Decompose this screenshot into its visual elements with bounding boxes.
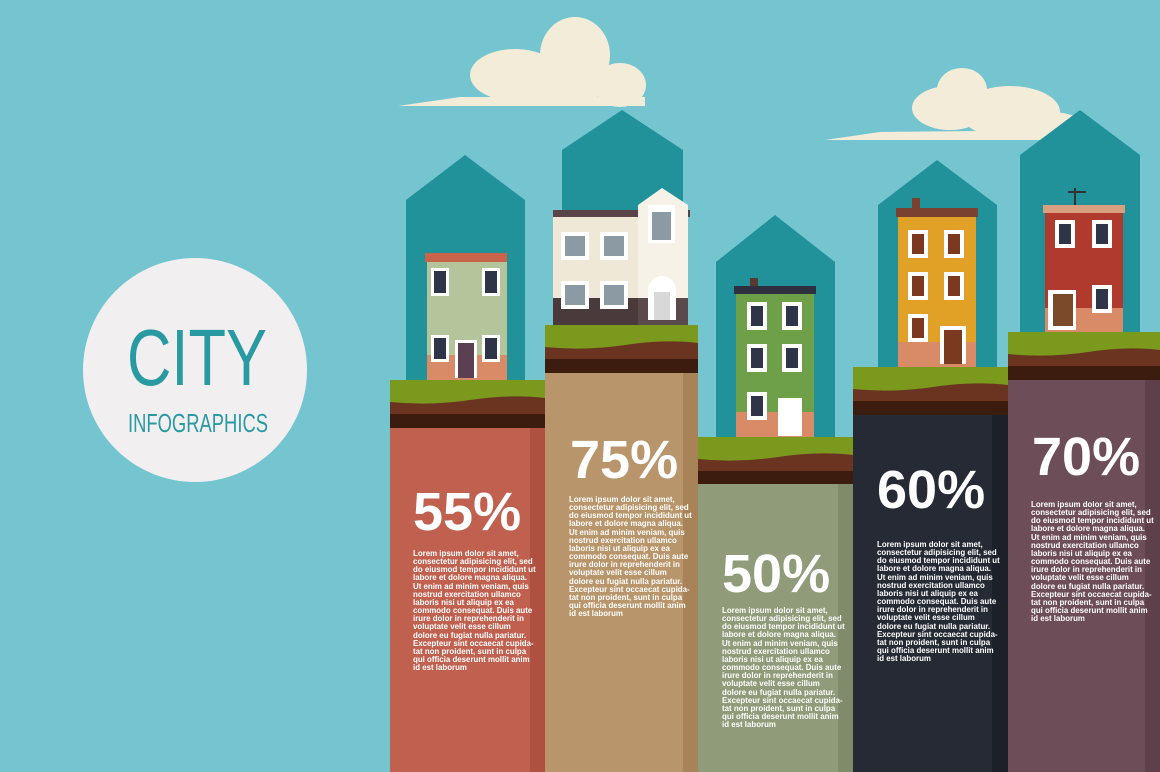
col 1 stats: 55% (413, 482, 521, 542)
title circle (83, 258, 307, 482)
house 4 yellow (896, 198, 978, 367)
house 3 green tall (734, 278, 816, 440)
clouds (398, 17, 1085, 140)
col 5 text: Lorem ipsum dolor sit amet, consectetur adipisicing elit, sed do eiusmod tempor incididunt ut labore et dolore magna aliqua. Ut enim ad minim veniam, quis nostrud exercitation ullamco laboris nisi ut aliquip ex ea commodo consequat. Duis aute irure dolor in reprehenderit in voluptate velit esse cillum dolore eu fugiat nulla pariatur. Excepteur sint occaecat cupida-tat non proident, sunt in culpa qui officia deserunt mollit anim id est laborum (1031, 500, 1154, 623)
columns (390, 373, 1160, 772)
col 5 stats: 70% (1032, 427, 1140, 487)
col 4 text: Lorem ipsum dolor sit amet, consectetur adipisicing elit, sed do eiusmod tempor incididunt ut labore et dolore magna aliqua. Ut enim ad minim veniam, quis nostrud exercitation ullamco laboris nisi ut aliquip ex ea commodo consequat. Duis aute irure dolor in reprehenderit in voluptate velit esse cillum dolore eu fugiat nulla pariatur. Excepteur sint occaecat cupida-tat non proident, sunt in culpa qui officia deserunt mollit anim id est laborum (877, 540, 1000, 663)
col 4 stats: 60% (877, 460, 985, 520)
house 1 green (425, 253, 507, 380)
house 5 red (1043, 188, 1125, 332)
col 1 text: Lorem ipsum dolor sit amet, consectetur adipisicing elit, sed do eiusmod tempor incididunt ut labore et dolore magna aliqua. Ut enim ad minim veniam, quis nostrud exercitation ullamco laboris nisi ut aliquip ex ea commodo consequat. Duis aute irure dolor in reprehenderit in voluptate velit esse cillum dolore eu fugiat nulla pariatur. Excepteur sint occaecat cupida-tat non proident, sunt in culpa qui officia deserunt mollit anim id est laborum (413, 549, 536, 672)
ground layers (390, 325, 1160, 484)
title circle: CITY (127, 313, 267, 402)
col 2 text: Lorem ipsum dolor sit amet, consectetur adipisicing elit, sed do eiusmod tempor incididunt ut labore et dolore magna aliqua. Ut enim ad minim veniam, quis nostrud exercitation ullamco laboris nisi ut aliquip ex ea commodo consequat. Duis aute irure dolor in reprehenderit in voluptate velit esse cillum dolore eu fugiat nulla pariatur. Excepteur sint occaecat cupida-tat non proident, sunt in culpa qui officia deserunt mollit anim id est laborum (569, 495, 692, 618)
col 3 stats: 50% (722, 544, 830, 604)
house 2 mansion (553, 188, 690, 325)
title circle: INFOGRAPHICS (128, 408, 268, 438)
teal house silhouettes (406, 110, 1140, 450)
col 3 text: Lorem ipsum dolor sit amet, consectetur adipisicing elit, sed do eiusmod tempor incididunt ut labore et dolore magna aliqua. Ut enim ad minim veniam, quis nostrud exercitation ullamco laboris nisi ut aliquip ex ea commodo consequat. Duis aute irure dolor in reprehenderit in voluptate velit esse cillum dolore eu fugiat nulla pariatur. Excepteur sint occaecat cupida-tat non proident, sunt in culpa qui officia deserunt mollit anim id est laborum (722, 606, 845, 729)
col 2 stats: 75% (570, 430, 678, 490)
